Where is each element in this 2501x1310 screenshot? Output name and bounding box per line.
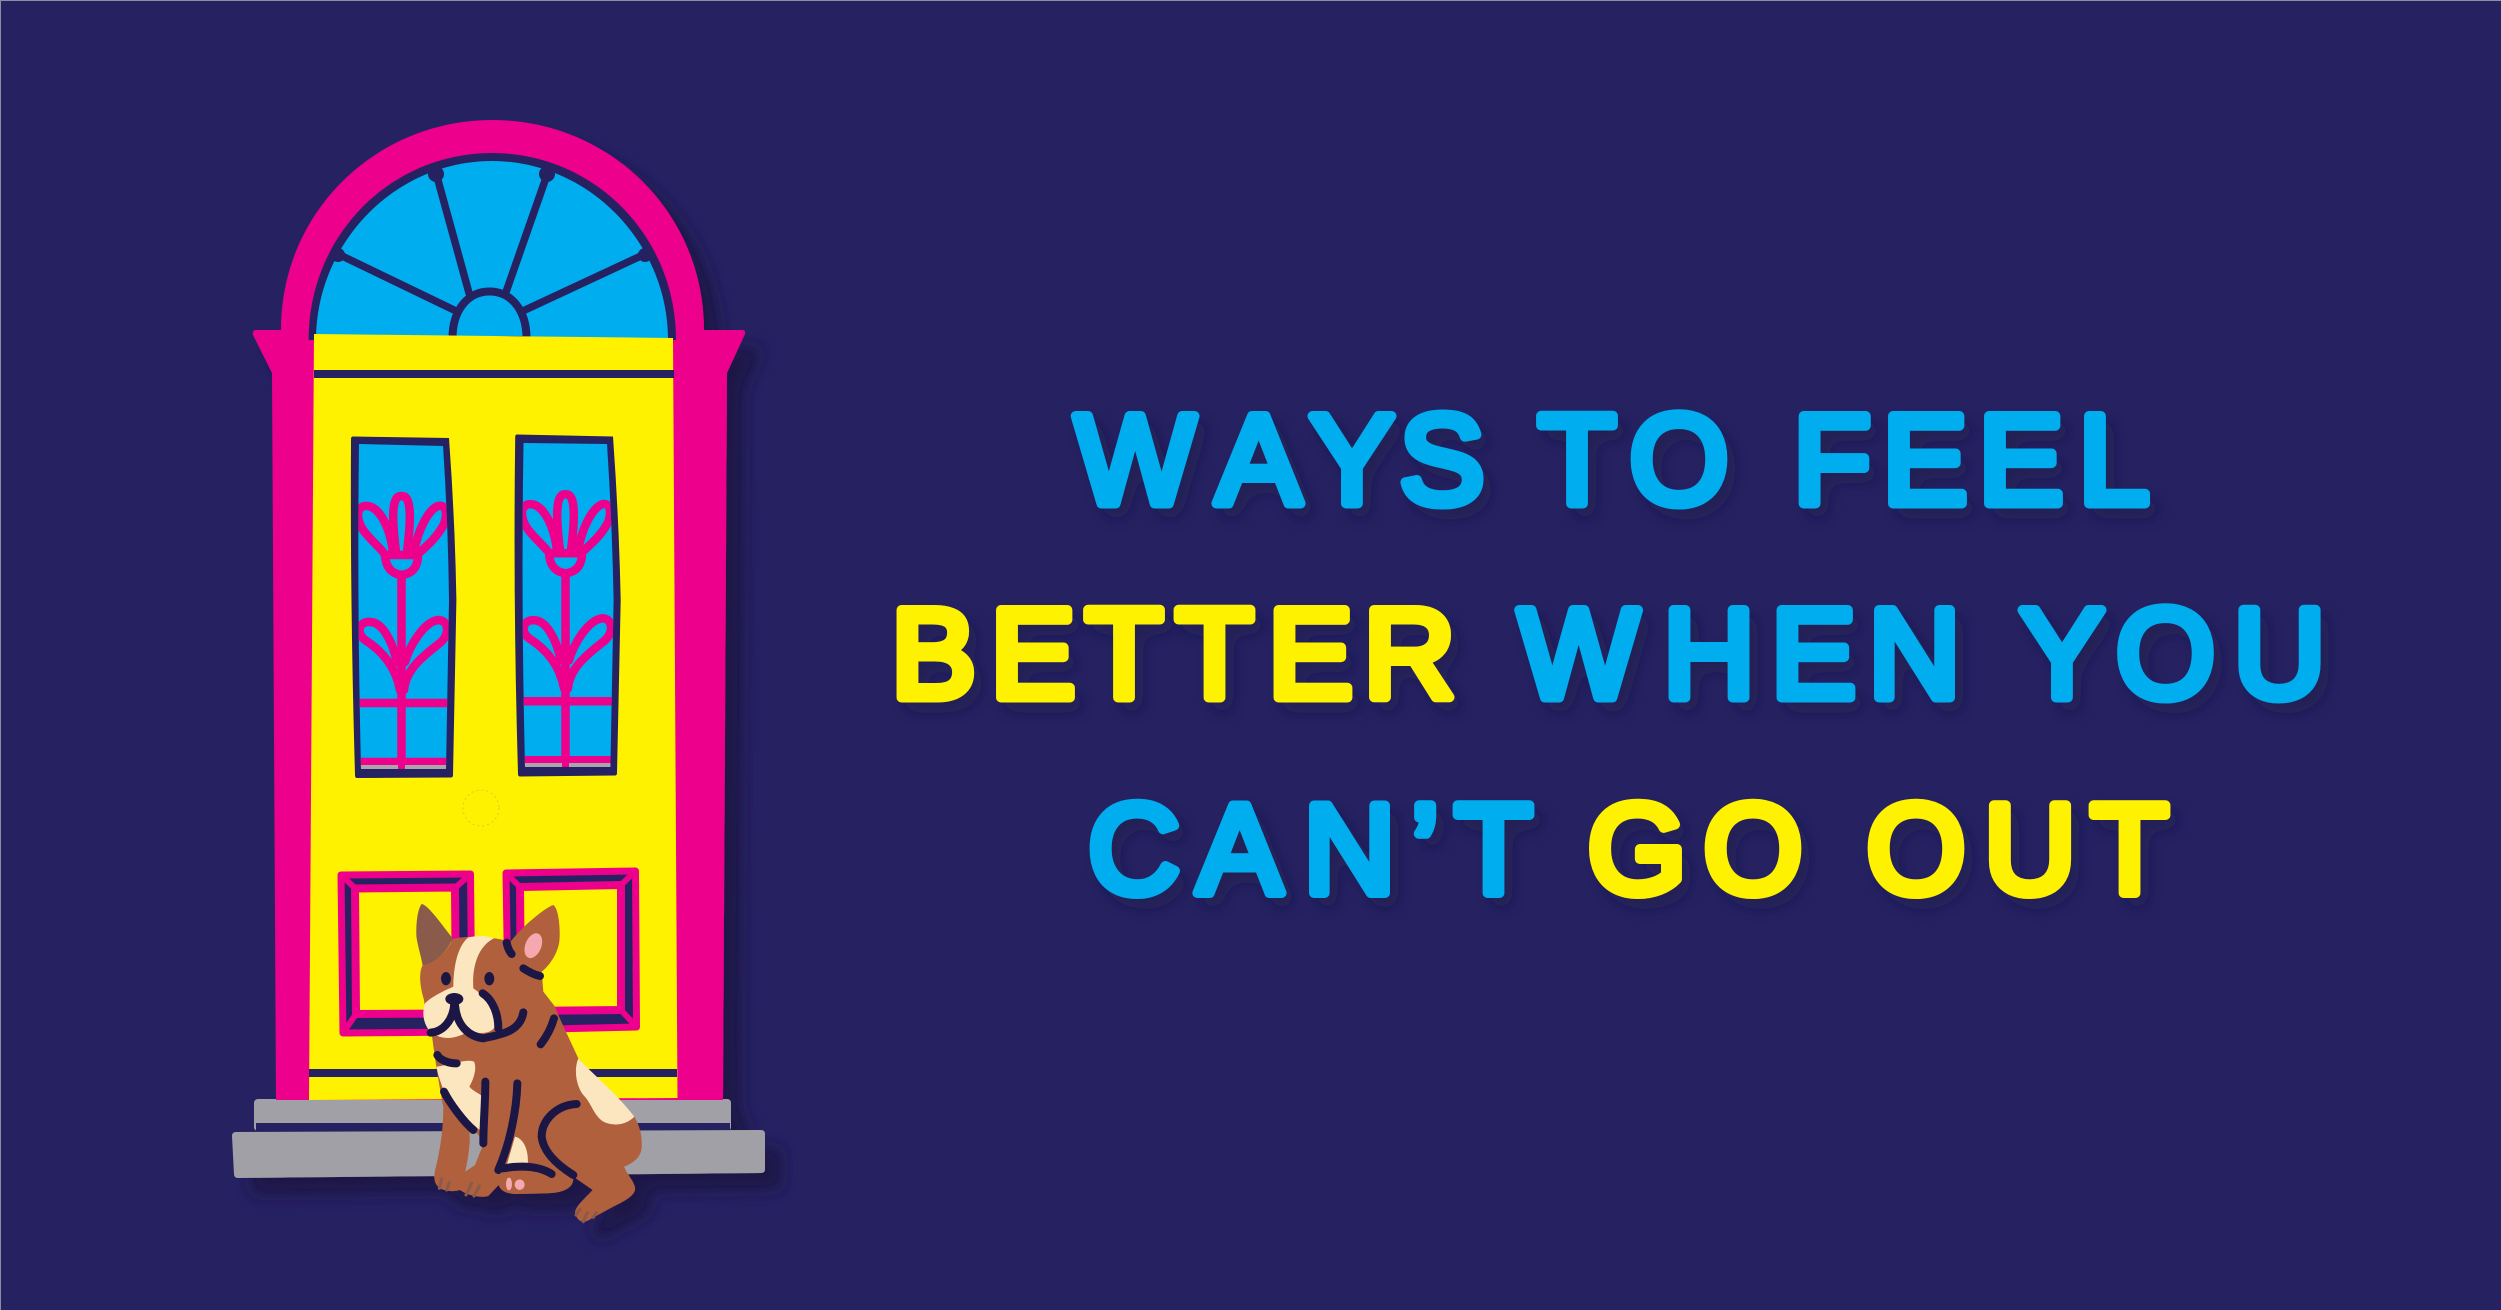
title <box>891 388 2325 920</box>
title line 2: BETTER <box>891 582 1455 724</box>
dog belly patch <box>507 1137 528 1167</box>
title line 3: CAN’T <box>1088 778 1578 920</box>
dog ear and paw markings <box>506 931 546 1190</box>
door left window <box>350 436 460 778</box>
dog left ear <box>416 904 453 966</box>
door knocker outline <box>463 790 499 826</box>
door leaf <box>309 334 678 1100</box>
dog <box>416 904 642 1222</box>
title line 1: WAYS TO FEEL <box>1075 388 2149 530</box>
illustration: front door and dog on steps <box>232 120 765 1222</box>
fanlight window <box>309 153 676 340</box>
dog eyes and nose <box>441 972 494 1005</box>
dog chest patch <box>437 1061 483 1130</box>
door bottom rail <box>309 1069 677 1077</box>
dog muzzle and blaze <box>423 936 495 1038</box>
door steps <box>232 1099 765 1178</box>
door right lower panel <box>506 871 636 1030</box>
title line 2: WHEN YOU <box>1462 582 2325 724</box>
gap between front legs <box>465 1131 482 1172</box>
door frame: pink arch and pillars <box>253 120 745 1100</box>
door right window <box>514 434 625 776</box>
door left lower panel <box>341 874 472 1033</box>
dog line work <box>431 943 577 1175</box>
door top rail <box>314 370 674 378</box>
dog body <box>420 905 642 1222</box>
dog toes <box>439 1179 596 1222</box>
title line 3: GO OUT <box>1588 778 2168 920</box>
dog haunch patch <box>576 1058 634 1124</box>
